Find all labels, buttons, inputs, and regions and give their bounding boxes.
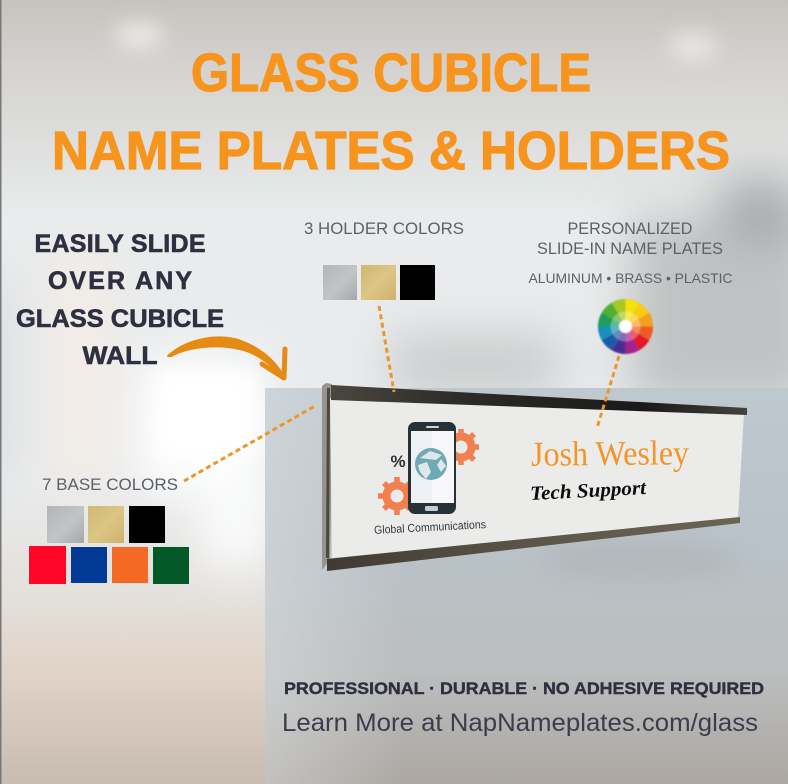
- heading: easily slide over any glass cubicle wall: WALL: [82, 342, 158, 370]
- swatches: base colors: [29, 506, 189, 584]
- plate face: [330, 398, 744, 558]
- label: 7 base colors: 7 BASE COLORS: [42, 475, 178, 494]
- title: NAME PLATES & HOLDERS: [52, 121, 730, 181]
- heading: easily slide over any glass cubicle wall: OVER ANY: [48, 267, 192, 295]
- icon: colour wheel: [598, 299, 653, 354]
- name plate holder: [322, 383, 747, 571]
- icon: phone: [408, 422, 456, 514]
- swatches: holder colors: [323, 265, 435, 300]
- icon: globe: [415, 448, 447, 480]
- title: GLASS CUBICLE: [191, 43, 591, 103]
- label: personalized slide-in name plates: [537, 219, 723, 258]
- logo: phone and gears: [374, 422, 487, 537]
- plate job title: Tech Support: [530, 477, 648, 505]
- arrow: curved orange: [168, 337, 285, 378]
- holder bracket side: [322, 383, 333, 570]
- holder bottom rail: [327, 517, 740, 571]
- heading: easily slide over any glass cubicle wall: GLASS CUBICLE: [16, 305, 224, 333]
- glass cubicle wall: [265, 388, 788, 784]
- label: personalized slide-in name plates: SLIDE-IN NAME PLATES: [537, 239, 723, 258]
- dotted leader: holder colors: [379, 306, 394, 392]
- holder dark inner edge: [326, 388, 330, 558]
- holder top rail: [331, 385, 747, 415]
- call to action: Learn More at NapNameplates.com/glass: [282, 709, 758, 737]
- percent sign: %: [390, 452, 406, 471]
- icon: upper gear: [443, 429, 479, 465]
- logo text: Global Communications: [374, 519, 487, 537]
- dotted leader: name plates: [597, 356, 619, 428]
- heading: easily slide over any glass cubicle wall: EASILY SLIDE: [34, 230, 206, 258]
- heading: easily slide over any glass cubicle wall: [16, 230, 224, 370]
- plate name: Josh Wesley: [531, 433, 690, 474]
- label: materials: ALUMINUM • BRASS • PLASTIC: [528, 270, 732, 286]
- icon: lower gear: [378, 477, 416, 515]
- label: personalized slide-in name plates: PERSONALIZED: [568, 219, 692, 238]
- title: [52, 43, 730, 181]
- label: 3 holder colors: 3 HOLDER COLORS: [304, 219, 464, 238]
- tagline: PROFESSIONAL · DURABLE · NO ADHESIVE REQUIRED: [284, 679, 764, 698]
- dotted leader: base colors: [184, 406, 315, 481]
